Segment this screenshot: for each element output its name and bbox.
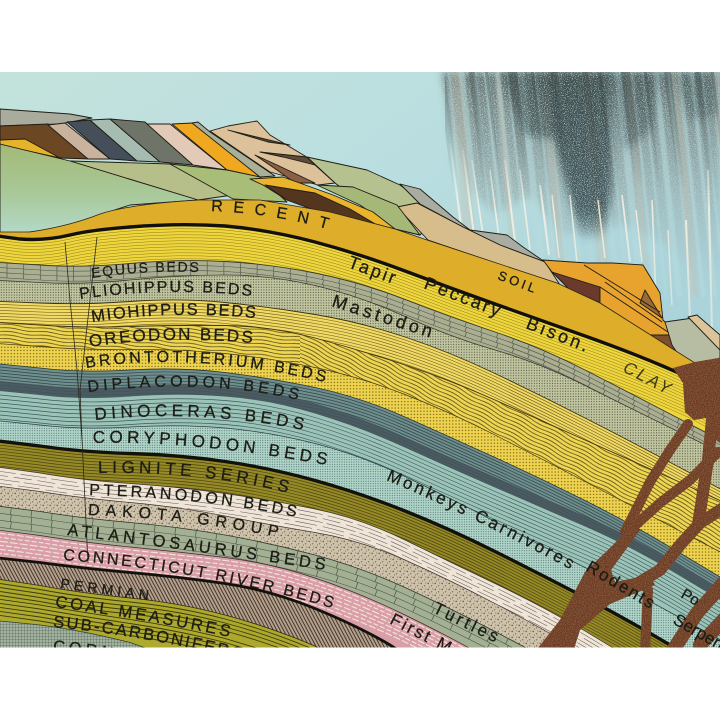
gray stepped rock xyxy=(664,318,720,362)
label: po: Po xyxy=(680,588,698,605)
label: diplacodon beds: DIPLACODON BEDS xyxy=(88,375,299,400)
layer: permian xyxy=(0,557,720,680)
rain cloud with streaks xyxy=(440,72,720,330)
layer: oreodon beds xyxy=(0,322,720,552)
sky xyxy=(0,72,720,334)
fault lines xyxy=(65,237,97,563)
label: coryphodon beds: CORYPHODON BEDS xyxy=(93,430,328,464)
label: rodents: Rodents xyxy=(586,560,654,608)
layer: connecticut river beds xyxy=(0,529,720,707)
label: oreodon beds: OREODON BEDS xyxy=(90,328,252,346)
label: brontotherium beds: BRONTOTHERIUM BEDS xyxy=(86,350,326,382)
block bedding lines xyxy=(584,264,668,332)
layer: atlantosaurus beds xyxy=(0,505,720,701)
strata: dark gray xyxy=(110,119,193,165)
strata: gray xyxy=(192,122,275,177)
layer: coal measures xyxy=(0,578,720,696)
label: clay: CLAY xyxy=(624,363,674,392)
label: pliohippus beds: PLIOHIPPUS BEDS xyxy=(80,280,252,299)
layer: diplacodon beds xyxy=(0,363,720,710)
layer: lignite series xyxy=(0,440,720,711)
layer: coryphodon beds xyxy=(0,420,720,680)
green right hill xyxy=(307,156,422,236)
strata: dark blue xyxy=(67,120,137,161)
dark brown band xyxy=(265,185,377,225)
tan slope xyxy=(397,203,560,285)
label: peccary: Peccary xyxy=(424,276,502,318)
layer: lowest grid rock xyxy=(0,620,720,680)
layer: dinoceras beds xyxy=(0,390,720,716)
orange block xyxy=(542,260,668,334)
pale green hillside xyxy=(0,144,198,236)
label: dinoceras beds: DINOCERAS BEDS xyxy=(95,404,304,430)
label: first mammals: First Mammals xyxy=(390,613,452,648)
layer: sub-carboniferous xyxy=(0,598,720,696)
label: turtles: Turtles xyxy=(436,602,498,642)
strata: pink xyxy=(48,123,110,159)
label: mastodon: Mastodon xyxy=(332,294,432,338)
mountains xyxy=(0,109,720,375)
strata: pale blue-gray xyxy=(90,119,160,162)
layer: pteranodon beds xyxy=(0,466,720,700)
label: atlantosaurus beds: ATLANTOSAURUS BEDS xyxy=(66,524,326,570)
label: recent: RECENT xyxy=(212,200,330,228)
label: pteranodon beds: PTERANODON BEDS xyxy=(90,484,297,516)
layer: equus beds xyxy=(0,260,720,448)
label: tapir: Tapir xyxy=(351,255,396,283)
label: lignite series: LIGNITE SERIES xyxy=(99,461,289,492)
beige rock xyxy=(688,315,720,350)
tree roots xyxy=(530,356,720,655)
shaded foot of block xyxy=(650,334,675,350)
tan peak xyxy=(210,121,335,185)
upper dark stripe xyxy=(228,130,290,145)
label: monkeys carnivores: Monkeys Carnivores xyxy=(387,470,574,568)
label: bison: Bison. xyxy=(526,317,585,352)
label: miohippus beds: MIOHIPPUS BEDS xyxy=(92,303,256,322)
label: connecticut river beds: CONNECTICUT RIVER BEDS xyxy=(64,549,334,608)
dark stripe on peak xyxy=(260,152,315,165)
gray ridge xyxy=(400,184,545,262)
layer: brontotherium beds xyxy=(0,343,720,576)
lower green ridge xyxy=(70,161,233,200)
brown patch in block xyxy=(552,272,600,303)
label: permian: PERMIAN xyxy=(61,578,148,600)
far gray hill xyxy=(0,109,92,126)
label: dakota group: DAKOTA GROUP xyxy=(89,504,278,536)
strata: brown xyxy=(0,124,90,159)
layer: miohippus beds xyxy=(0,300,720,500)
strata: orange sliver xyxy=(0,139,60,158)
brown streak on peak xyxy=(255,155,315,183)
label: corniferous: CORNIFEROUS xyxy=(54,640,113,648)
lower green ridge 2 xyxy=(170,164,287,202)
strata: light pink xyxy=(147,124,227,170)
label: coal measures: COAL MEASURES xyxy=(56,596,230,636)
green foot xyxy=(317,185,420,235)
layer: clay xyxy=(0,223,706,432)
layer: dakota group xyxy=(0,485,720,680)
yellow band xyxy=(250,177,395,229)
soil band xyxy=(0,200,695,373)
label: soil: SOIL xyxy=(498,272,534,293)
layer: pliohippus beds xyxy=(0,274,720,488)
shaded peak of block xyxy=(640,290,662,318)
label: equus beds: EQUUS BEDS xyxy=(92,262,198,278)
strata: orange xyxy=(172,123,260,177)
